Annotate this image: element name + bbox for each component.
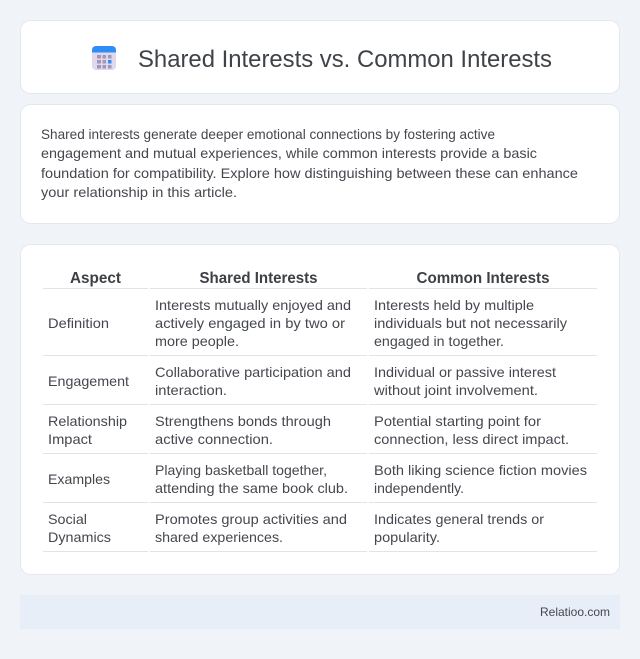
title: Shared Interests vs. Common Interests (138, 46, 552, 73)
row: social dynamics: shared experiences. (155, 529, 283, 545)
row: social dynamics: popularity. (374, 529, 440, 545)
panel: introduction (20, 104, 620, 224)
row: engagement: Collaborative participation and (155, 364, 351, 380)
intro paragraph: Shared interests generate deeper emotional connections by fostering active (41, 126, 495, 142)
row: relationship impact: Impact (48, 431, 92, 447)
intro paragraph: your relationship in this article. (41, 184, 237, 200)
row: examples: Examples (48, 471, 110, 487)
row: engagement: interaction. (155, 382, 227, 398)
row: relationship impact (48, 413, 569, 447)
row: examples: Both liking science fiction movies (374, 462, 587, 478)
row: definition: engaged in together. (374, 333, 504, 349)
row: relationship impact: Potential starting point for (374, 413, 541, 429)
row: definition: Definition (48, 315, 109, 331)
intro paragraph (41, 126, 578, 200)
row: relationship impact: active connection. (155, 431, 273, 447)
footer (20, 595, 620, 629)
row: definition: Interests mutually enjoyed and (155, 297, 351, 313)
row: social dynamics: Indicates general trends or (374, 511, 544, 527)
row: definition: individuals but not necessarily (374, 315, 567, 331)
intro paragraph: engagement and mutual experiences, while common interests provide a basic (41, 145, 537, 161)
table header: Aspect (70, 270, 122, 287)
row: engagement (48, 364, 556, 398)
intro paragraph: foundation for compatibility. Explore how distinguishing between these can enhance (41, 165, 578, 181)
row: relationship impact: Strengthens bonds through (155, 413, 331, 429)
row: social dynamics (48, 511, 544, 545)
row: examples: Playing basketball together, (155, 462, 327, 478)
row: definition: actively engaged in by two or (155, 315, 345, 331)
row: definition (48, 297, 567, 349)
row: examples: attending the same book club. (155, 480, 348, 496)
row: engagement: without joint involvement. (373, 382, 538, 398)
table header: Common Interests (416, 270, 550, 287)
panel: title card (20, 20, 620, 94)
row: relationship impact: connection, less direct impact. (374, 431, 569, 447)
panel: comparison table (20, 244, 620, 574)
row: relationship impact: Relationship (48, 413, 127, 429)
row: social dynamics: Promotes group activities and (155, 511, 347, 527)
row: examples: independently. (374, 480, 464, 496)
table header: Shared Interests (200, 270, 318, 287)
table header (70, 270, 550, 287)
row: engagement: Engagement (48, 373, 129, 389)
row: social dynamics: Social (48, 511, 87, 527)
row: definition: Interests held by multiple (374, 297, 534, 313)
row: definition: more people. (155, 333, 239, 349)
footer: Relatioo.com (540, 605, 610, 619)
row: examples (48, 462, 587, 496)
row: social dynamics: Dynamics (48, 529, 111, 545)
row: engagement: Individual or passive interest (374, 364, 556, 380)
icon: calendar (92, 46, 116, 70)
